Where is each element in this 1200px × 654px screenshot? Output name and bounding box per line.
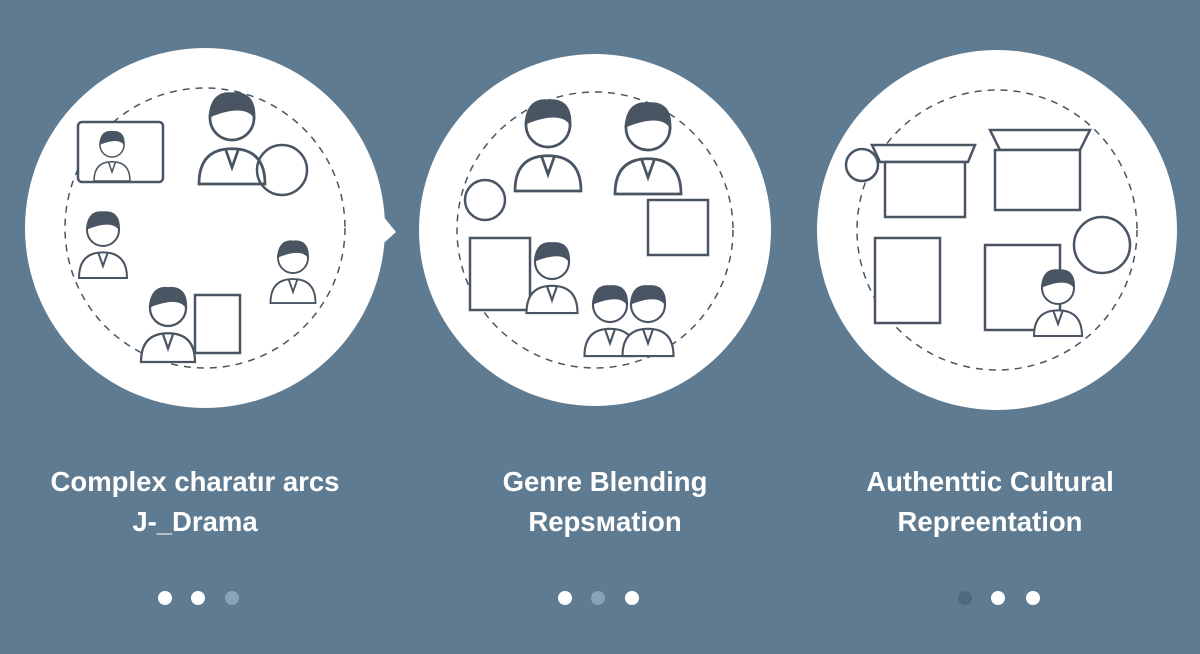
- panel: circle 2: [419, 54, 771, 406]
- caption 3: Authenttic Cultural: [866, 466, 1114, 497]
- caption 1: Complex charatır arcs: [51, 466, 339, 497]
- caption 2: Repsмation: [528, 506, 682, 537]
- caption 1: [51, 466, 339, 537]
- panel: circle 1: [25, 48, 396, 408]
- dots 3: [958, 591, 1040, 605]
- caption 1: J-_Drama: [132, 506, 258, 537]
- caption 2: [503, 466, 707, 537]
- caption 2: Genre Blending: [503, 466, 707, 497]
- dots 2: [558, 591, 639, 605]
- caption 3: Repreentation: [898, 506, 1082, 537]
- panel: circle 3: [817, 50, 1177, 410]
- dots 1: [158, 591, 239, 605]
- caption 3: [866, 466, 1114, 537]
